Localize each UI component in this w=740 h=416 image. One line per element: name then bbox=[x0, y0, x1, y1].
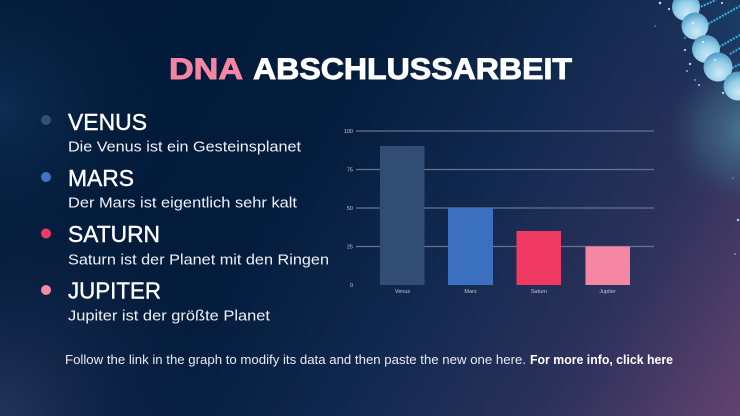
text: Saturn description: Saturn ist der Planet mit den Ringen bbox=[68, 252, 329, 268]
bar: Mars bbox=[448, 208, 493, 285]
x axis labels: Venus bbox=[395, 289, 410, 295]
y axis labels: 75 bbox=[347, 168, 353, 174]
icon: DNA strand bbox=[654, 0, 740, 255]
y axis labels: 0 bbox=[350, 283, 353, 289]
y axis labels: 100 bbox=[344, 129, 353, 135]
legend: Saturn bbox=[41, 221, 329, 268]
legend: Jupiter bbox=[41, 278, 271, 324]
x axis labels: Saturn bbox=[531, 289, 547, 295]
heading: Mars: MARS bbox=[68, 165, 134, 191]
icon: Jupiter bullet bbox=[41, 285, 51, 295]
icon: Venus bullet bbox=[41, 115, 51, 125]
title: DNA bbox=[169, 53, 243, 86]
heading: Saturn: SATURN bbox=[68, 221, 160, 247]
legend: Venus bbox=[41, 109, 302, 156]
heading: Jupiter: JUPITER bbox=[68, 278, 161, 304]
bar chart bbox=[344, 129, 654, 295]
text: Jupiter description: Jupiter ist der größte Planet bbox=[68, 308, 271, 324]
title: ABSCHLUSSARBEIT bbox=[253, 53, 572, 86]
footer text: Follow the link in the graph to modify its data and then paste the new one here. bbox=[65, 352, 526, 367]
bar: Venus bbox=[380, 146, 424, 285]
text: Mars description: Der Mars ist eigentlich sehr kalt bbox=[68, 194, 298, 212]
icon: Mars bullet bbox=[41, 172, 51, 182]
bar: Jupiter bbox=[586, 246, 630, 285]
x axis labels: Jupiter bbox=[599, 289, 616, 295]
y axis labels bbox=[344, 129, 353, 289]
icon: Saturn bullet bbox=[41, 228, 51, 238]
x axis labels bbox=[395, 289, 616, 295]
heading: Venus: VENUS bbox=[68, 109, 147, 135]
text: Venus description: Die Venus ist ein Gesteinsplanet bbox=[68, 138, 302, 156]
bar: Saturn bbox=[516, 231, 561, 285]
legend: Mars bbox=[41, 165, 298, 212]
y axis labels: 50 bbox=[347, 206, 353, 212]
x axis labels: Mars bbox=[464, 289, 477, 295]
footer text: For more info, click here bbox=[530, 352, 673, 367]
y axis labels: 25 bbox=[347, 244, 353, 250]
